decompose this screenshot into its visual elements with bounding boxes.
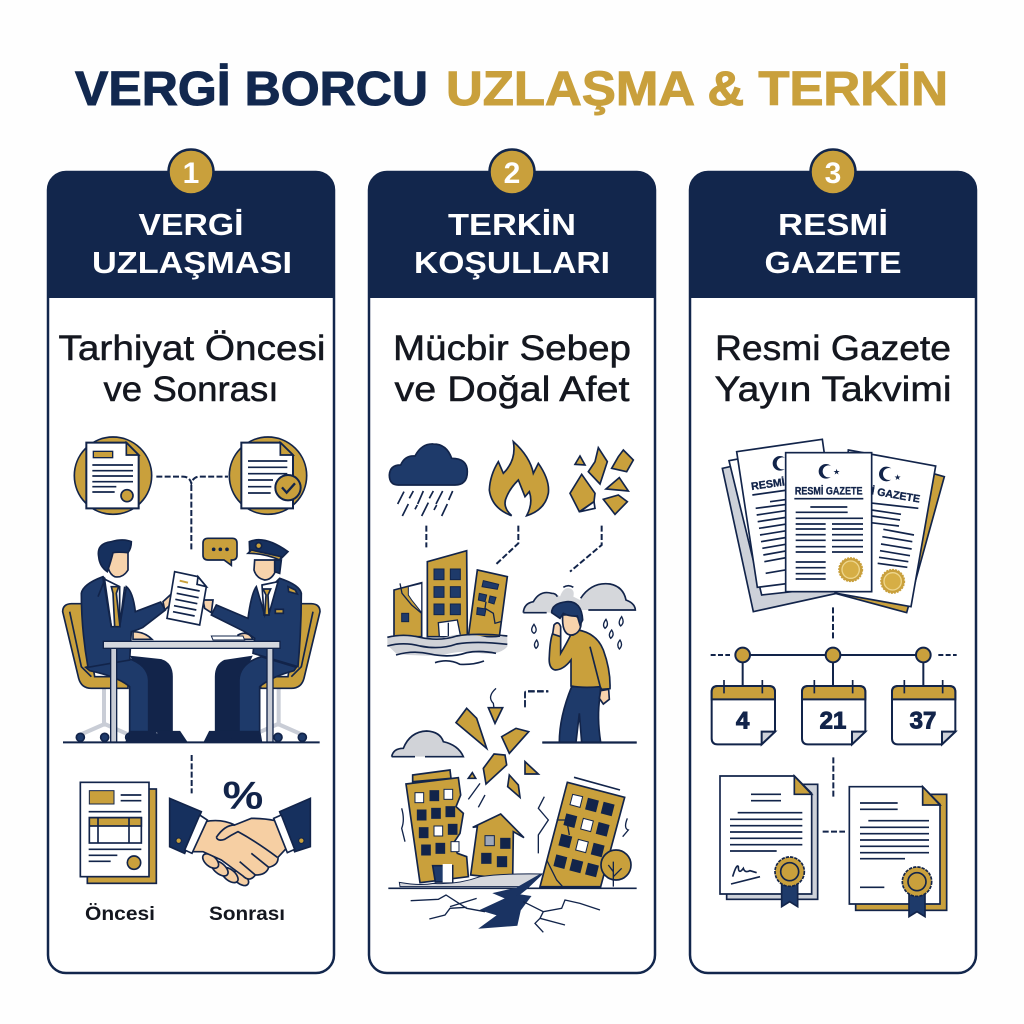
leaning right building [540,782,625,887]
title: UZLAŞMA & TERKİN [446,63,948,116]
tax officer [203,540,301,742]
panel 3 heading [764,207,902,280]
panel 1 header band [48,172,334,298]
calendar 4 [712,680,775,744]
panel 1 subheading: Tarhiyat Öncesi [58,329,326,368]
signed certificate [720,776,818,907]
panel 2 heading [414,207,610,280]
calendar 21 [802,680,865,744]
center gazette page [786,453,872,592]
center gazette page: ★ [833,467,840,476]
left gazette page [737,439,842,587]
panel 2 header band [369,172,655,298]
panel 2 subheading: Mücbir Sebep [393,329,631,368]
panel 3 header band [690,172,976,298]
panel 1 subheading [58,329,326,409]
icon: certificates with seals [720,757,947,917]
panel 2 subheading [393,329,631,409]
left chair [63,604,134,741]
panel: terkin koşulları [369,150,655,973]
number badge 2 [490,150,534,194]
title: VERGİ BORCU [75,63,428,116]
label: sonrası: Sonrası [209,904,285,925]
center gazette page: RESMİ GAZETE [795,485,862,498]
panel 1 heading: UZLAŞMASI [92,245,292,280]
number badge 1 [168,150,214,194]
table [63,636,320,742]
panel 1 subheading: ve Sonrası [104,370,278,409]
calendar 21: 21 [820,707,846,734]
panel 1 heading: VERGİ [138,207,244,242]
panel 2 subheading: ve Doğal Afet [394,370,630,409]
panel 2 heading: KOŞULLARI [414,245,610,280]
label: öncesi: Öncesi [85,904,155,925]
leaning left building [406,770,468,883]
illustration: damaged buildings in flood [387,551,507,664]
icons: storm fire and debris [389,442,633,572]
speech bubble [203,538,237,565]
illustration: distressed person in rain [523,584,637,743]
number badge 2: 2 [504,157,520,190]
right chair [249,604,320,741]
panel 3 heading: RESMİ [778,207,888,242]
calendar 37: 37 [910,707,936,734]
panel 2 heading: TERKİN [448,207,576,242]
timeline with three calendar dates [711,648,957,744]
panel 3 subheading: Yayın Takvimi [714,370,952,409]
calendar 4: 4 [736,707,750,734]
illustration: earthquake collapsed buildings [388,688,637,932]
icon: before form and handshake after [80,755,310,888]
panel 3 subheading [714,329,952,409]
panel: vergi uzlaşması [48,150,334,973]
panel 1 heading [92,207,292,280]
panel 3 subheading: Resmi Gazete [715,329,951,368]
tree [601,850,631,887]
calendar 37 [892,680,955,744]
sealed certificate [849,787,947,917]
taxpayer [81,540,186,742]
icon: official gazette stack [722,439,944,640]
number badge 3: 3 [825,157,841,190]
title [75,63,948,116]
number badge 1: 1 [183,157,199,190]
ground crack [388,874,637,932]
handshake [170,798,310,888]
icon: flame [489,442,549,516]
icon: earthquake debris [570,448,633,514]
number badge 3 [810,150,856,194]
right gazette page [837,450,936,607]
small house [471,814,524,879]
panel: resmi gazete [690,150,976,973]
right gazette page: RESMİ GAZETE [840,479,921,506]
panel 3 heading: GAZETE [764,245,902,280]
right gazette page: ★ [894,473,901,482]
shared document [167,572,206,625]
left gazette page: RESMİ GAZETE [750,469,831,493]
illustration: taxpayer and tax officer at table [63,538,320,742]
icon: tax documents before and after [74,437,307,552]
icon: rain cloud [389,444,467,516]
icon: before form and handshake after: % [223,774,263,818]
